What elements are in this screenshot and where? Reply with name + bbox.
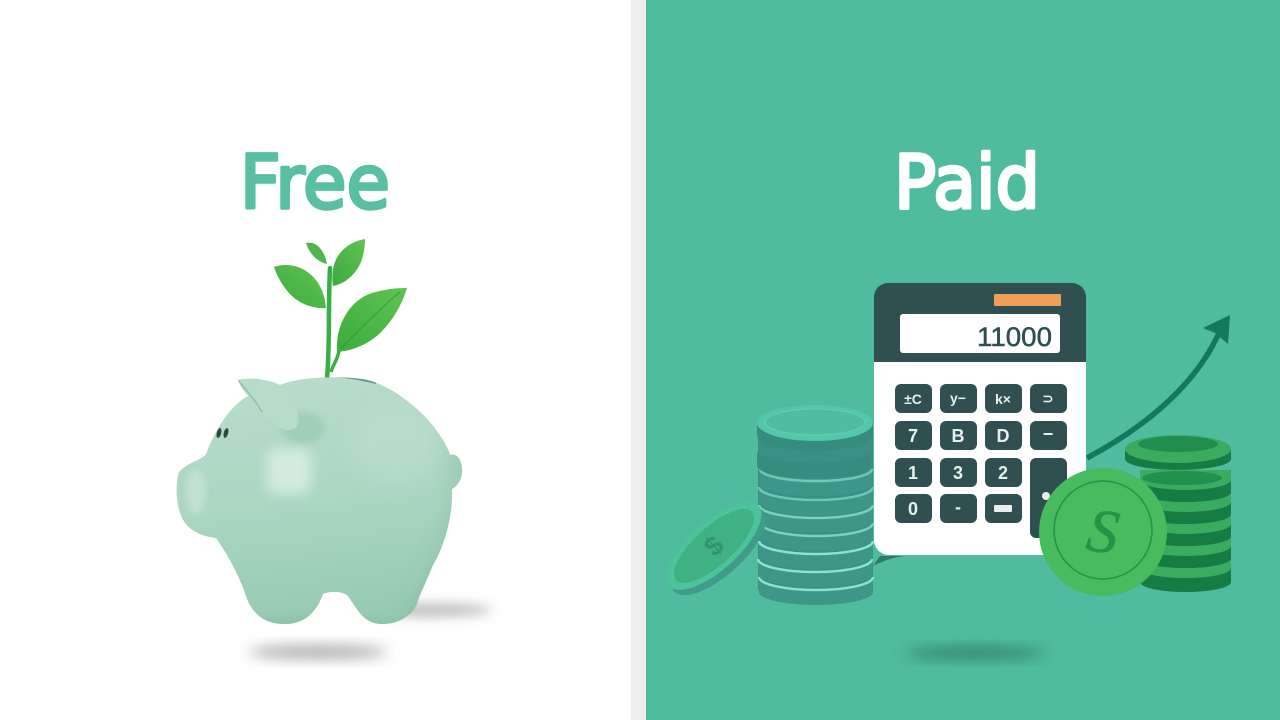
ground shadow bbox=[905, 647, 1045, 659]
calculator key labels bbox=[904, 390, 1053, 519]
green stacked coin layers bbox=[1140, 470, 1231, 592]
calculator key labels: ±C bbox=[904, 391, 922, 407]
icon: green coin stack bbox=[1125, 435, 1231, 592]
heading: Free: Free bbox=[240, 140, 390, 226]
calculator key labels: 1 bbox=[908, 463, 918, 483]
icon: piggy bank with sprout bbox=[177, 239, 492, 659]
arrow: growth bbox=[1087, 315, 1230, 458]
calculator keys bbox=[895, 384, 1067, 538]
divider strip bbox=[631, 0, 646, 720]
calculator key labels: D bbox=[996, 426, 1010, 446]
icon: tilted coin bbox=[653, 488, 779, 609]
pig eye bbox=[216, 428, 229, 438]
heading: Paid: Paid bbox=[894, 140, 1040, 226]
stacked coin layers bbox=[757, 451, 873, 605]
calculator key labels: 2 bbox=[998, 463, 1008, 483]
calculator key labels: k× bbox=[995, 391, 1011, 407]
pig body bbox=[176, 377, 462, 624]
calculator key labels: - bbox=[955, 497, 961, 517]
icon: tilted coin: $ bbox=[698, 530, 730, 562]
icon: large dollar coin: S bbox=[1083, 496, 1123, 568]
calculator display: 11000 bbox=[977, 322, 1052, 352]
calculator key labels: y− bbox=[950, 390, 966, 406]
pig ground shadow bbox=[248, 604, 492, 659]
calculator key labels: ⊃ bbox=[1043, 391, 1053, 406]
calculator badge bbox=[994, 294, 1061, 306]
panel: free bbox=[176, 152, 492, 668]
calculator key labels: B bbox=[952, 426, 964, 446]
calculator key labels: − bbox=[1043, 424, 1053, 444]
icon: tall coin stack bbox=[757, 405, 873, 605]
icon: large dollar coin bbox=[1039, 468, 1167, 596]
sprout bbox=[274, 239, 407, 378]
calculator key labels: 7 bbox=[908, 426, 918, 446]
green top coin bbox=[1125, 435, 1231, 470]
calculator key labels: 3 bbox=[953, 463, 963, 483]
calculator key labels: 0 bbox=[908, 499, 918, 519]
calculator display bbox=[900, 314, 1060, 353]
icon: calculator bbox=[873, 283, 1086, 566]
panel: paid bbox=[646, 0, 1280, 720]
top coin bbox=[757, 405, 873, 451]
